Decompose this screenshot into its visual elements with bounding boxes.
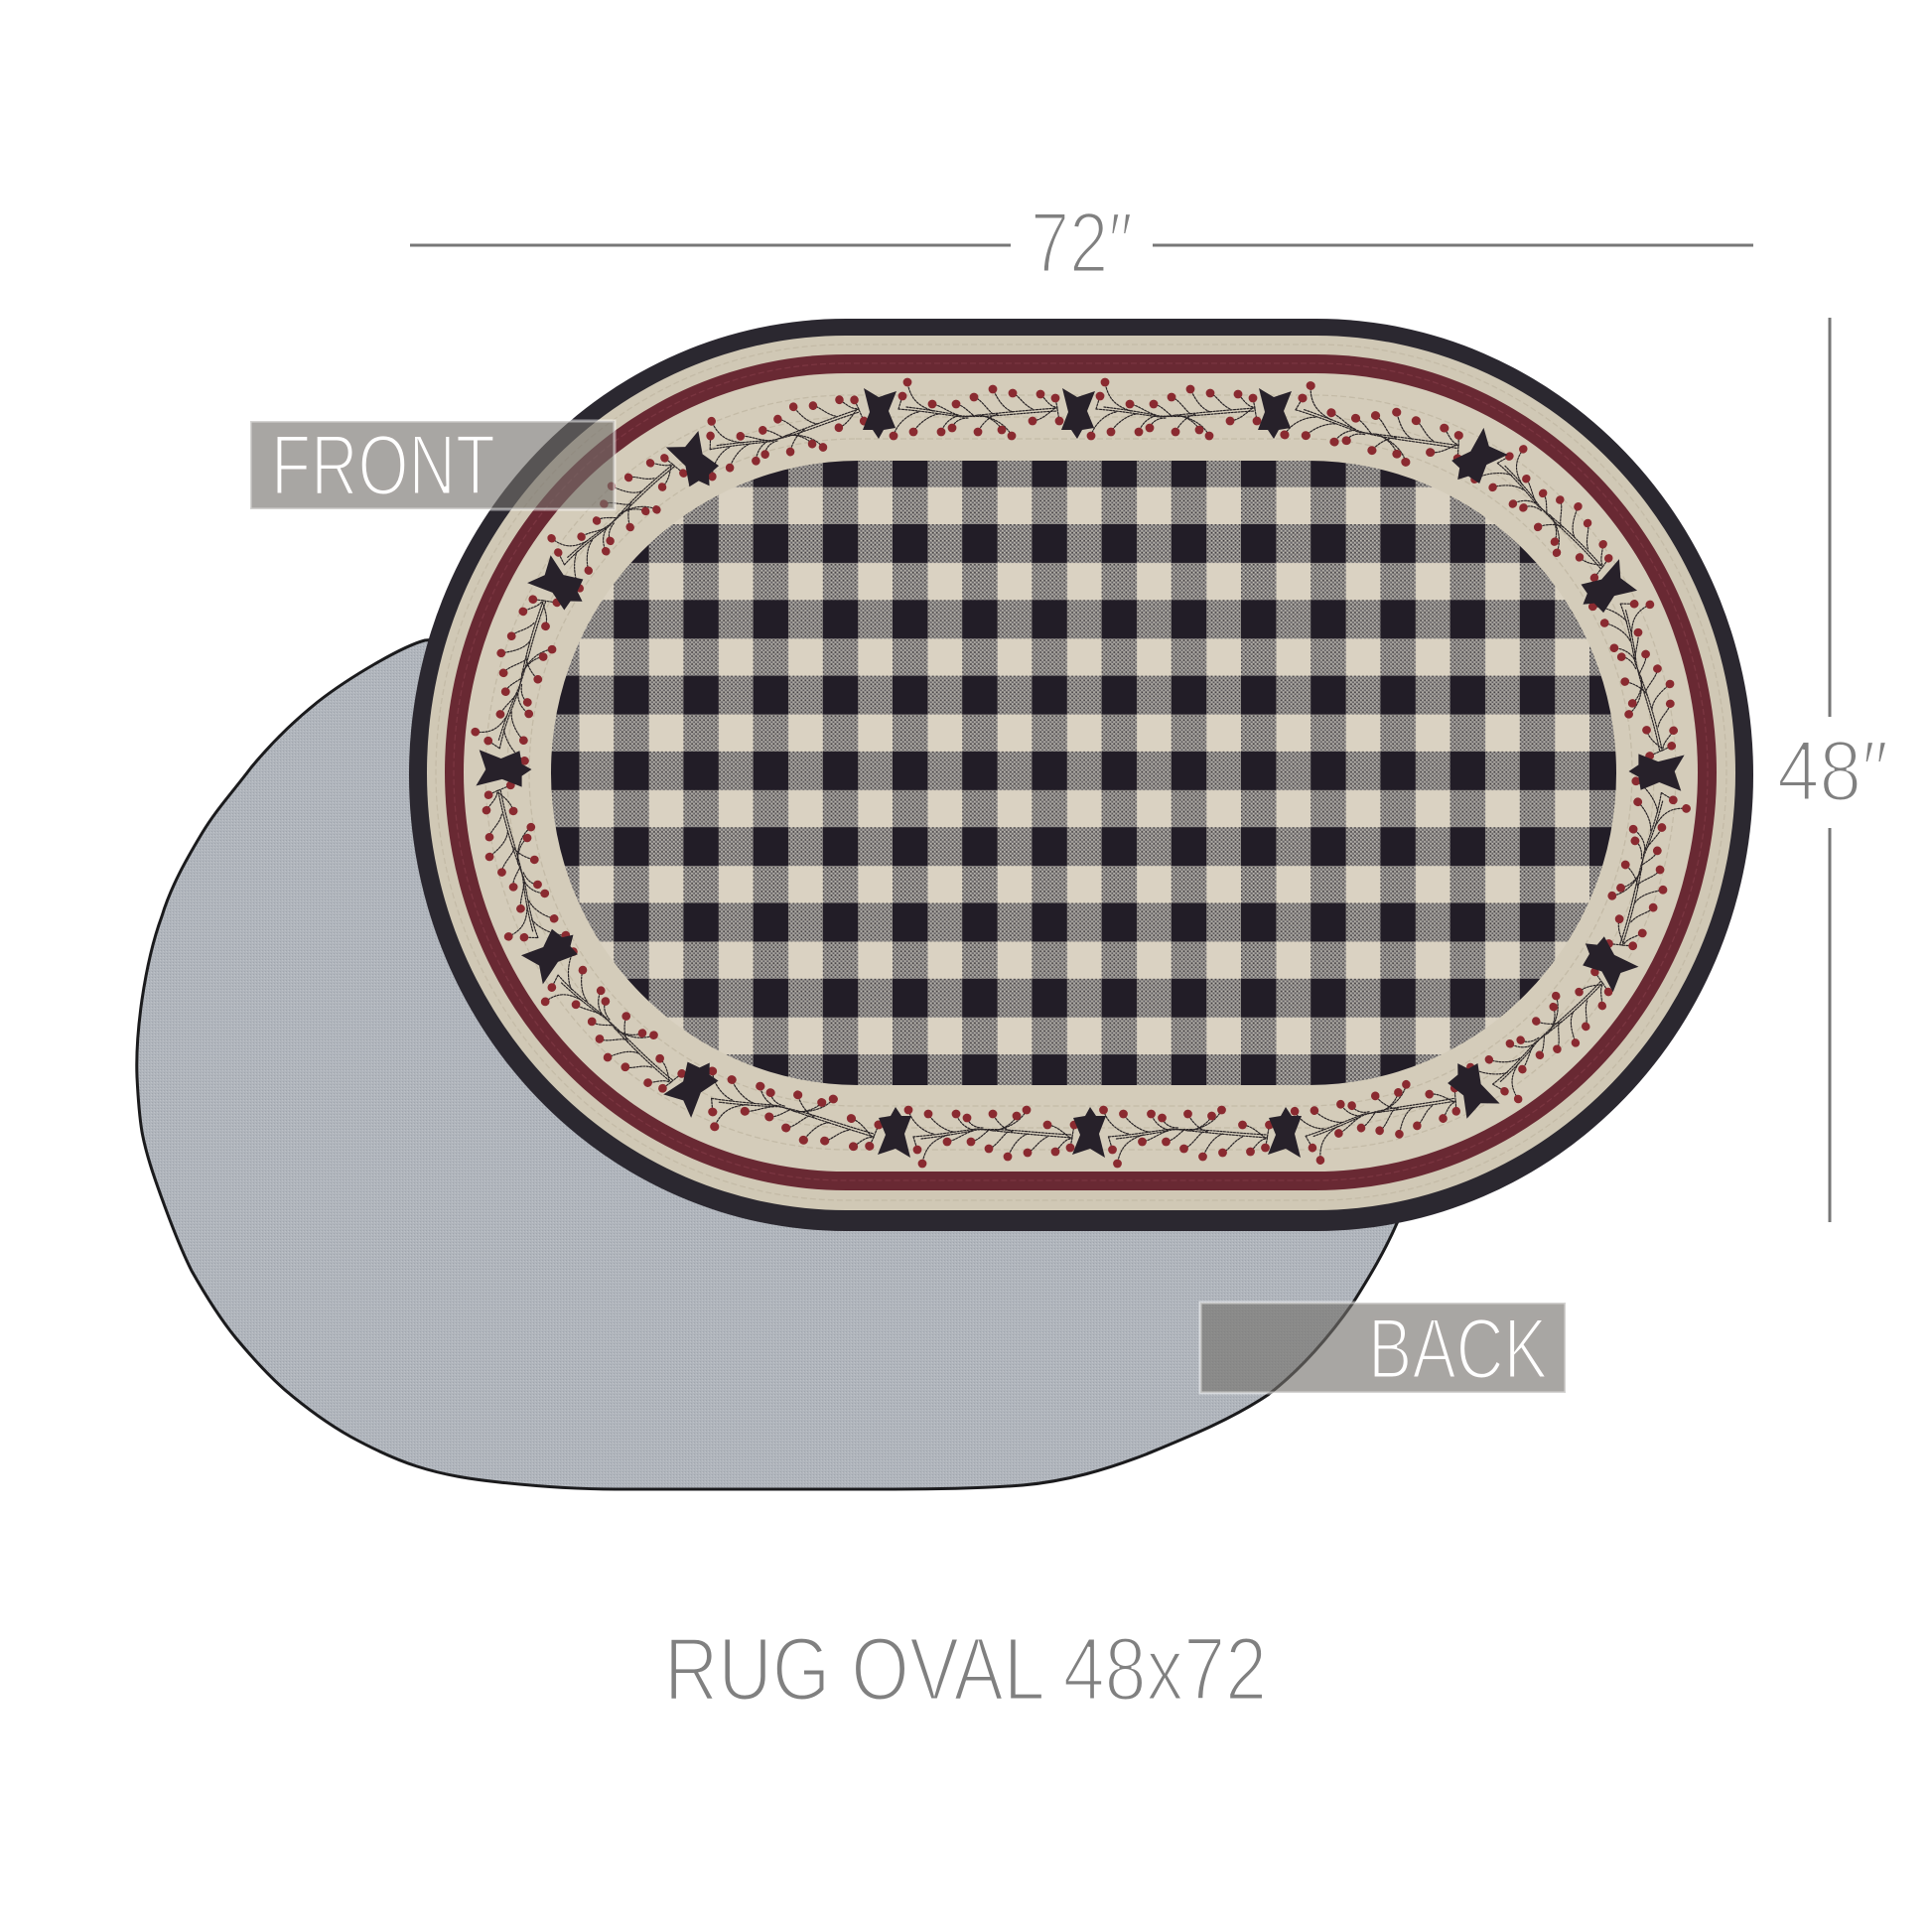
label: back: BACK: [1368, 1302, 1548, 1397]
label: back: [1200, 1302, 1566, 1397]
height dimension: 48 inches: 48″: [1777, 724, 1888, 819]
buffalo check centre: [551, 461, 1616, 1085]
label: front: FRONT: [271, 418, 495, 513]
title caption: RUG OVAL 48x72: [664, 1620, 1267, 1720]
primitive stars: [476, 388, 1685, 1158]
front of rug: [409, 319, 1753, 1231]
cream inner ring: [464, 373, 1698, 1172]
burgundy band: [445, 354, 1717, 1190]
back of rug: [137, 596, 1440, 1489]
width dimension: 72 inches: 72″: [1031, 196, 1133, 291]
berry vine garland: [466, 377, 1695, 1169]
outer beige band: [427, 336, 1735, 1210]
outer dark border: [409, 319, 1753, 1231]
